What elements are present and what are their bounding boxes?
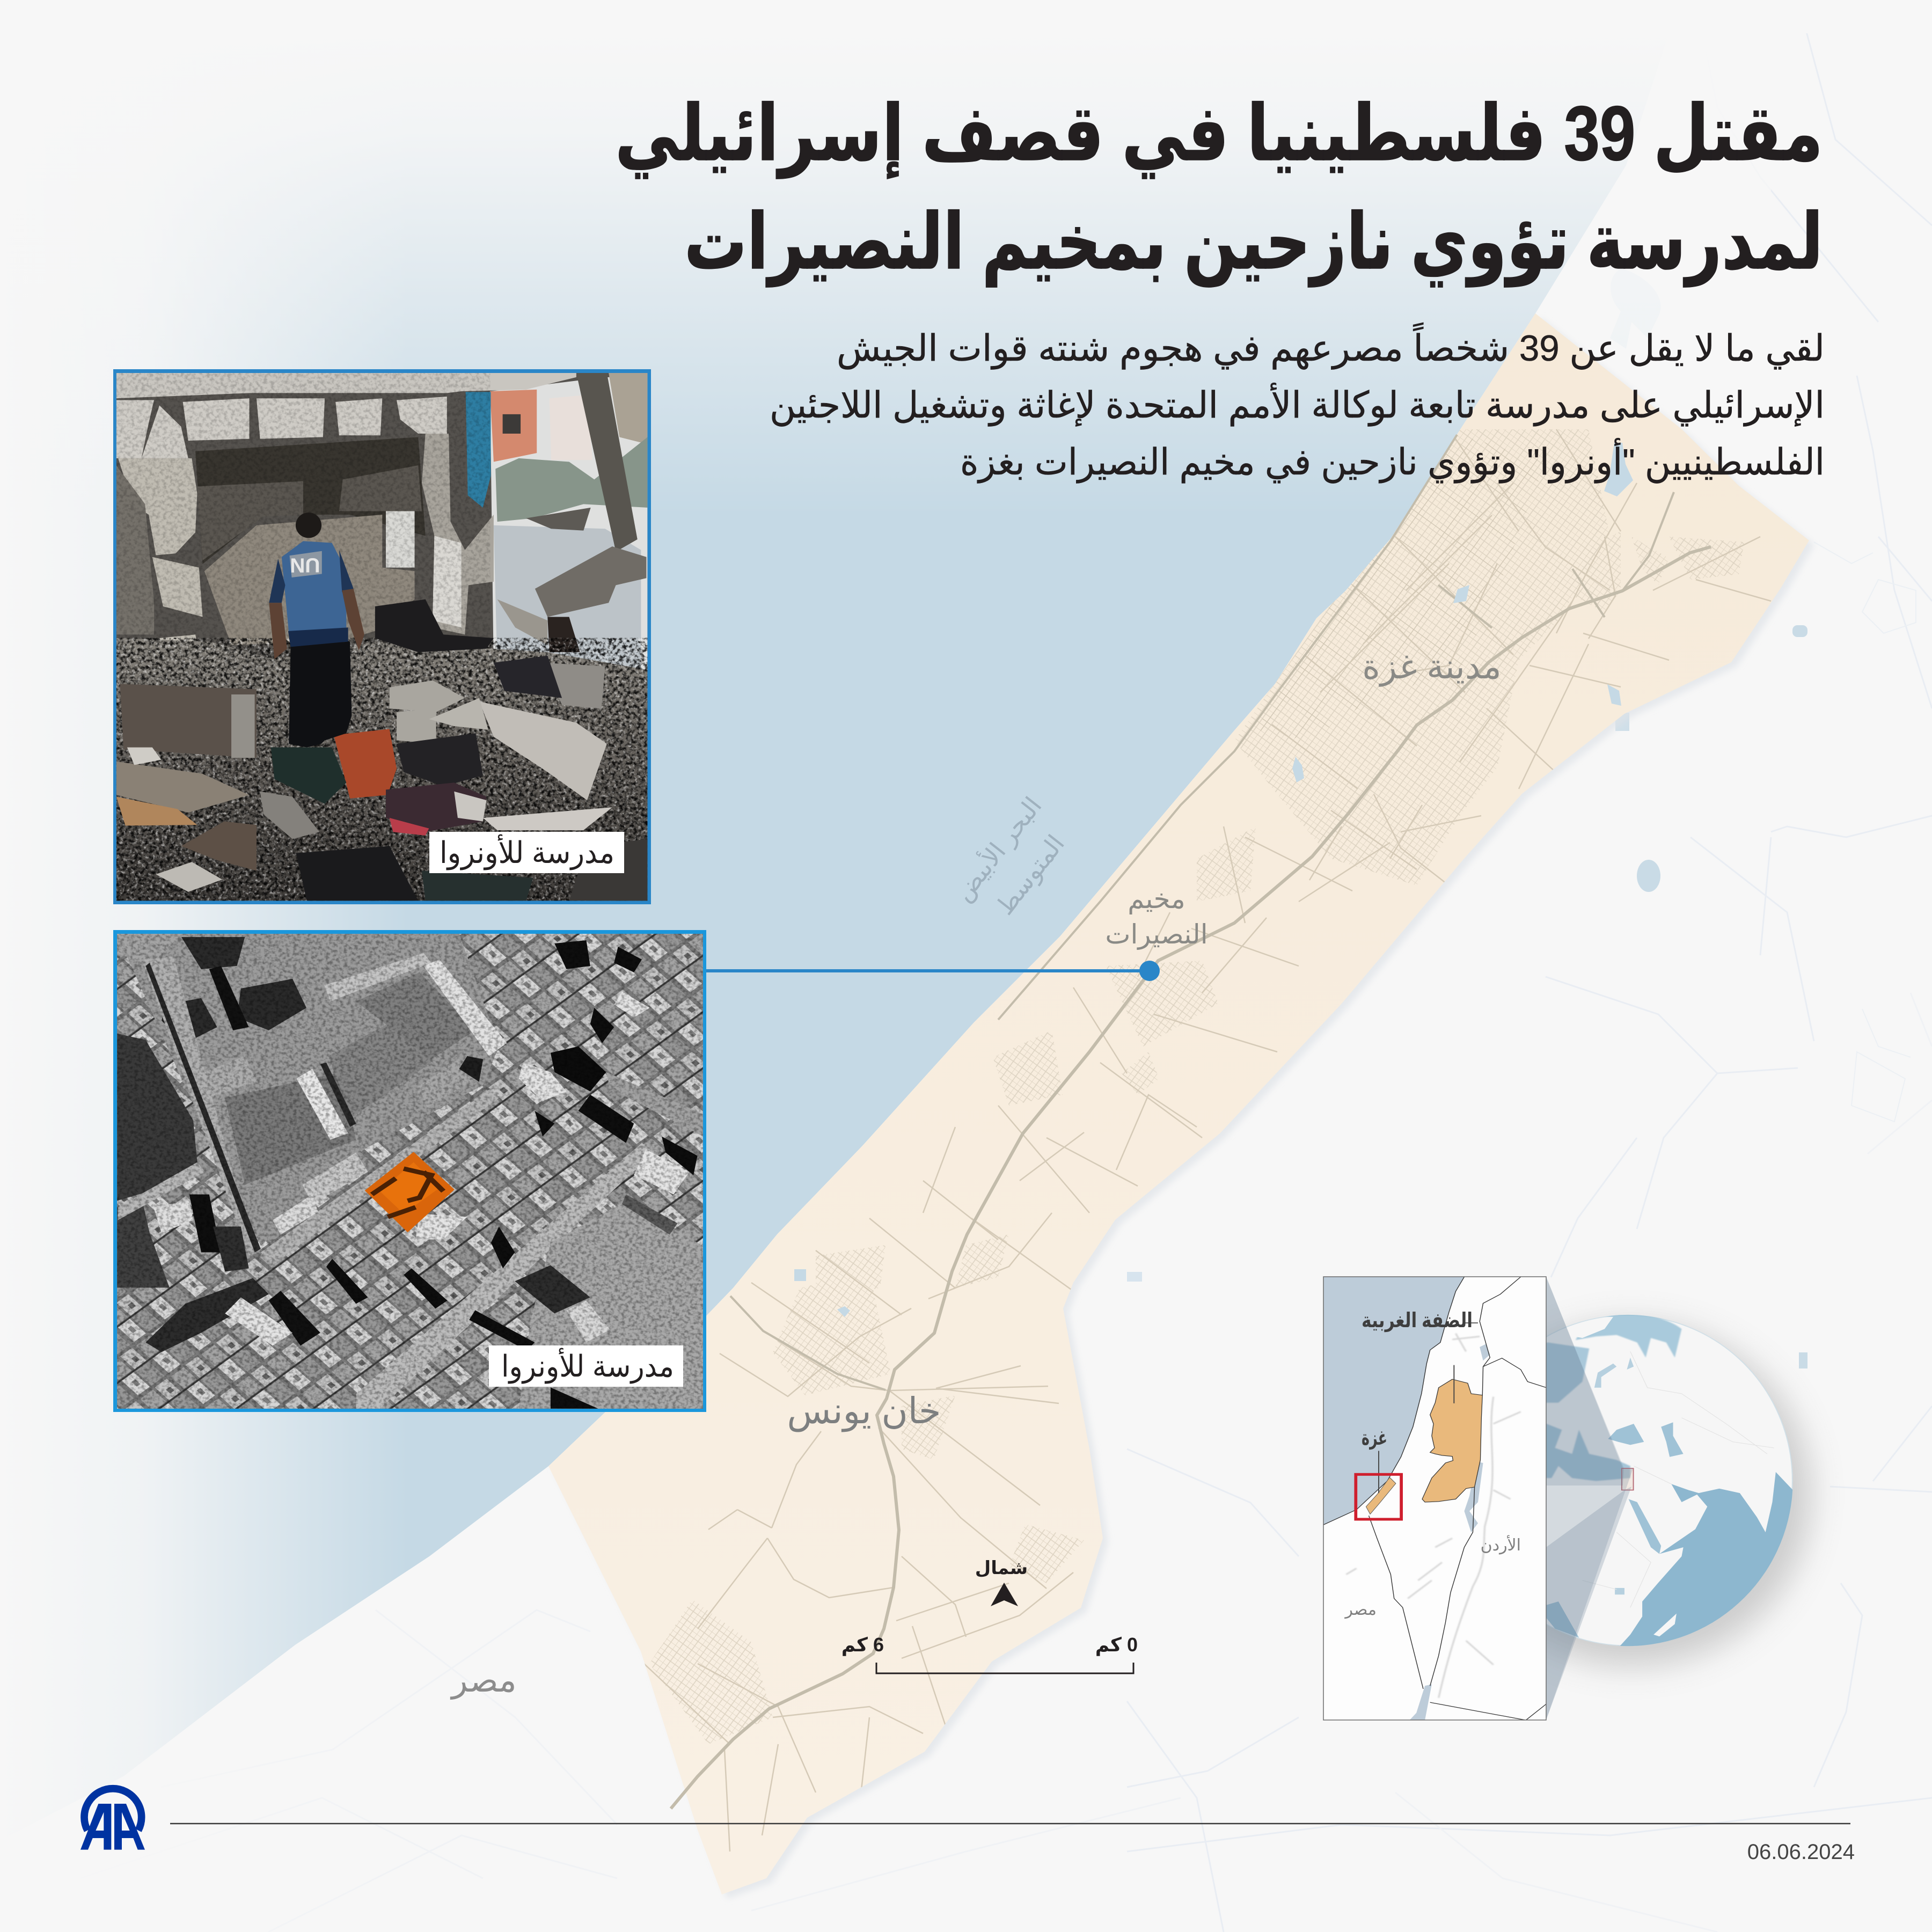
person — [269, 513, 364, 748]
scale bar — [841, 1634, 1138, 1673]
person: UN — [290, 554, 320, 576]
destroyed building highlight — [365, 1152, 455, 1232]
map: minor roads — [644, 429, 1771, 1851]
title — [615, 90, 1823, 288]
intro text block: الفلسطينيين "أونروا" وتؤوي نازحين في مخيم النصيرات بغزة — [960, 438, 1825, 484]
map: Gaza Strip land — [548, 313, 1814, 1899]
projection cone — [1546, 1277, 1633, 1720]
satellite label: UNRWA school: مدرسة للأونروا — [501, 1348, 674, 1384]
photo label: UNRWA school: مدرسة للأونروا — [440, 834, 614, 870]
Caspian Sea — [1661, 1422, 1684, 1457]
map: small water bodies — [794, 443, 1633, 1317]
West Bank — [1422, 1379, 1482, 1502]
title: مقتل 39 فلسطينيا في قصف إسرائيلي — [615, 90, 1823, 179]
Indian Ocean — [1616, 1472, 1793, 1650]
Red Sea — [1629, 1499, 1661, 1554]
map label: Khan Younis: خان يونس — [787, 1391, 941, 1432]
intro text block — [770, 322, 1825, 484]
satellite image panel — [115, 932, 704, 1410]
map extent marker on globe — [1622, 1468, 1634, 1490]
locator globe — [1547, 1311, 1824, 1679]
intro text block: لقي ما لا يقل عن 39 شخصاً مصرعهم في هجوم شنته قوات الجيش — [837, 322, 1825, 370]
map label: Nuseirat camp: مخيم — [1128, 884, 1185, 914]
map label: Egypt: مصر — [450, 1662, 517, 1700]
highlight box — [1356, 1474, 1401, 1519]
map: settlement street grids — [649, 429, 1744, 1744]
South Atlantic edge — [1538, 1601, 1579, 1638]
icon: north arrow — [991, 1583, 1018, 1606]
inset locator map: الأردن — [1481, 1534, 1521, 1554]
inset locator map: مصر — [1344, 1601, 1377, 1619]
footer divider line — [170, 1823, 1850, 1824]
map label: Gaza City: مدينة غزة — [1362, 647, 1502, 687]
Mediterranean and Atlantic — [1462, 1424, 1630, 1490]
connector line and location dot — [706, 961, 1160, 981]
Baltic Sea — [1594, 1364, 1616, 1388]
lakes and Dead Sea — [1409, 1344, 1490, 1720]
intro text block: الإسرائيلي على مدرسة تابعة لوكالة الأمم المتحدة لإغاثة وتشغيل اللاجئين — [770, 383, 1825, 427]
Black Sea — [1608, 1424, 1644, 1445]
map label: Nuseirat camp: النصيرات — [1105, 919, 1208, 950]
logo: Anadolu Agency — [80, 1789, 145, 1850]
map: main road — [671, 435, 1711, 1809]
background lakes — [1127, 268, 1807, 1368]
scale bar: 0 كم — [1095, 1634, 1138, 1656]
date: 06.06.2024 — [1747, 1840, 1855, 1864]
north arrow label: شمال — [975, 1558, 1028, 1578]
map label: Mediterranean Sea: البحر الأبيض — [948, 791, 1048, 907]
inset locator map — [1323, 1277, 1547, 1720]
Gaza Strip — [1366, 1477, 1396, 1514]
inset locator map: غزة — [1362, 1427, 1387, 1450]
map label: Nuseirat camp — [1105, 884, 1208, 950]
inset locator map: الضفة الغربية — [1362, 1309, 1473, 1332]
photo panel: UNRWA school ruins — [115, 371, 649, 902]
map label: Mediterranean Sea: المتوسط — [991, 830, 1071, 921]
scale bar: 6 كم — [841, 1634, 884, 1656]
leader lines — [1379, 1323, 1478, 1493]
